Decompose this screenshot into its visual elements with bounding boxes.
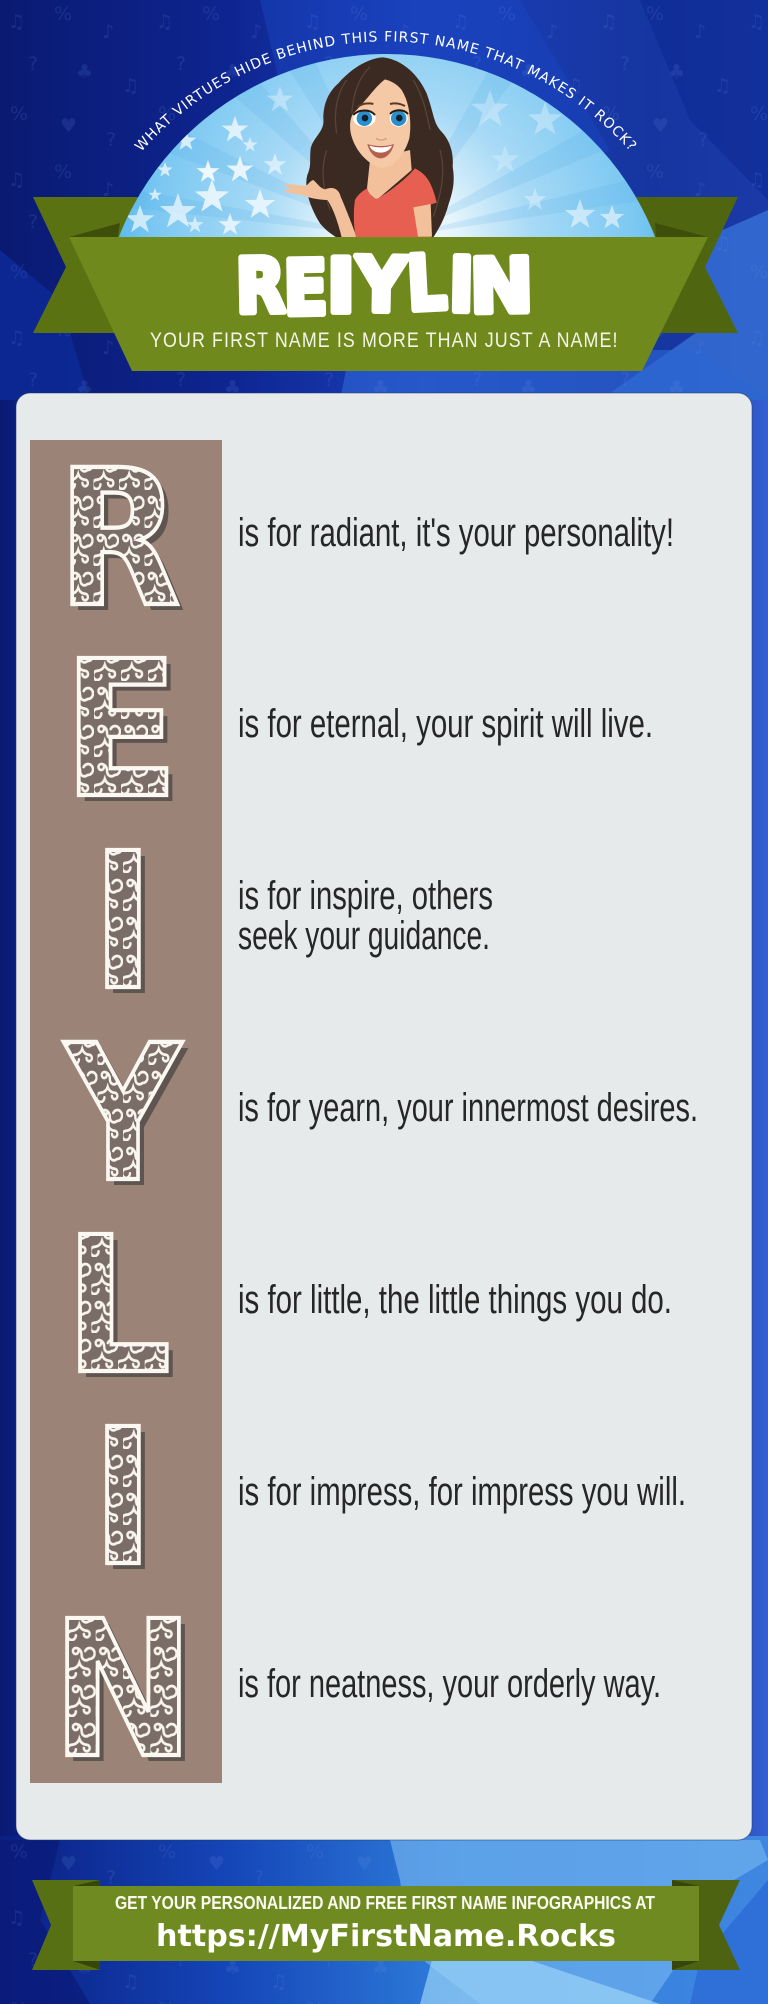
banner subtitle: YOUR FIRST NAME IS MORE THAN JUST A NAME! bbox=[150, 329, 618, 352]
curved tagline: WHAT VIRTUES HIDE BEHIND THIS FIRST NAME THAT MAKES IT ROCK? bbox=[134, 31, 636, 150]
decorative letter E: E bbox=[63, 622, 179, 840]
decorative letter R: R bbox=[57, 431, 181, 649]
decorative letter I: I bbox=[92, 814, 154, 1032]
hair bbox=[306, 57, 454, 240]
name title: N bbox=[469, 242, 534, 330]
footer call to action: GET YOUR PERSONALIZED AND FREE FIRST NAME INFOGRAPHICS AT bbox=[115, 1893, 655, 1913]
name title bbox=[235, 239, 534, 333]
name title: E bbox=[283, 245, 328, 333]
decorative letter R: R bbox=[63, 437, 187, 655]
decorative letter Y: Y bbox=[63, 1006, 183, 1224]
sunburst dome bbox=[118, 54, 656, 237]
smile bbox=[367, 138, 394, 158]
neck and chest bbox=[367, 150, 412, 200]
decorative letter L: L bbox=[71, 1203, 177, 1421]
header ribbon tails bbox=[33, 197, 738, 333]
decorative letter I: I bbox=[98, 1396, 160, 1614]
line for I: seek your guidance. bbox=[238, 914, 490, 958]
decorative letter I: I bbox=[98, 820, 160, 1038]
name title: I bbox=[326, 244, 356, 331]
footer ribbon bbox=[32, 1880, 740, 1970]
character illustration bbox=[283, 57, 454, 240]
footer url: https://MyFirstName.Rocks bbox=[156, 1919, 616, 1954]
name title: Y bbox=[354, 242, 409, 330]
decorative letter N: N bbox=[57, 1587, 201, 1806]
name title: I bbox=[448, 241, 475, 329]
decorative letter N: N bbox=[51, 1581, 195, 1800]
line for I: is for inspire, others bbox=[238, 874, 493, 918]
eyes bbox=[353, 103, 408, 127]
main green banner bbox=[69, 237, 708, 371]
name title: R bbox=[235, 243, 286, 331]
header ribbon folds bbox=[69, 223, 708, 237]
letter column bbox=[30, 440, 222, 1783]
decorative letter Y: Y bbox=[69, 1012, 189, 1230]
decorative letter I: I bbox=[92, 1390, 154, 1608]
decorative letter E: E bbox=[69, 628, 185, 846]
face bbox=[350, 79, 410, 168]
line for I bbox=[238, 874, 493, 958]
arm and hand bbox=[283, 180, 357, 237]
content card bbox=[16, 393, 752, 1840]
sleeve arm bbox=[413, 204, 432, 237]
decorative letter L: L bbox=[65, 1197, 171, 1415]
red top bbox=[354, 168, 437, 237]
name title: L bbox=[405, 239, 449, 329]
